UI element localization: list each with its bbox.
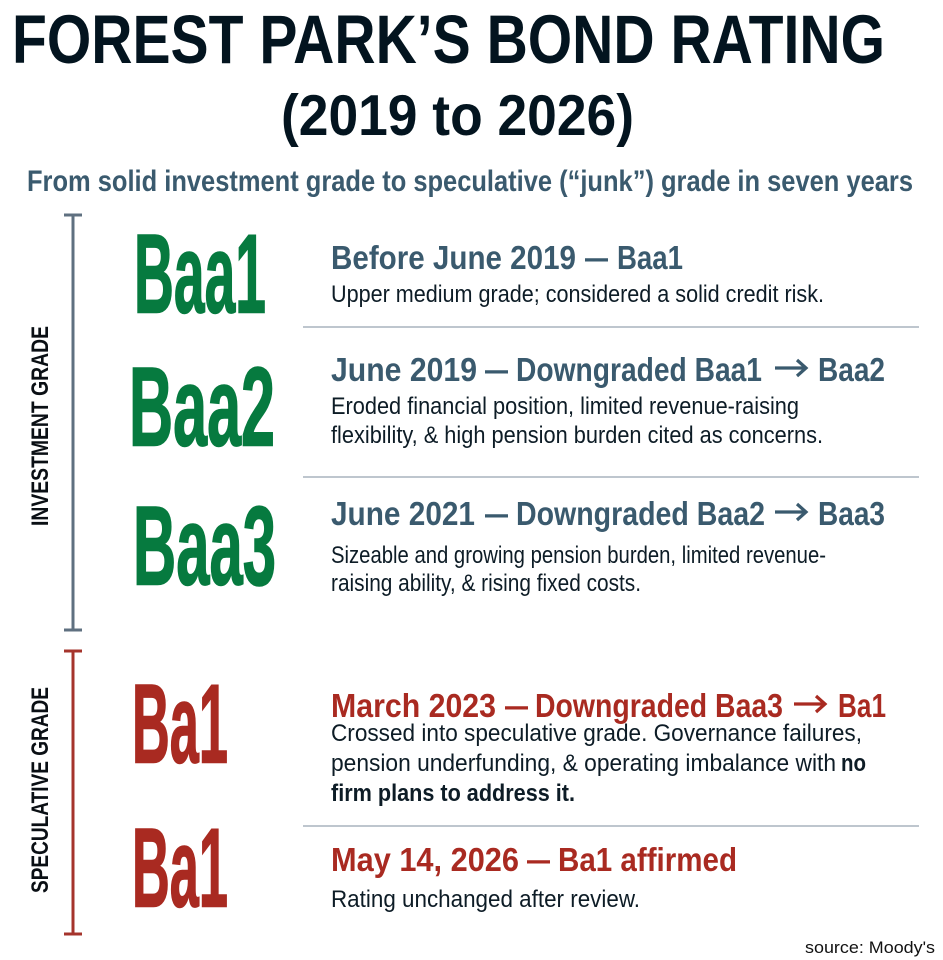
entry: before June 2019: Before June 2019: [331, 240, 576, 277]
entry: June 2019: June 2019: [331, 352, 477, 389]
rating: Baa3: Baa3: [133, 484, 276, 608]
title: (2019 to 2026): [281, 84, 634, 148]
bracket: investment grade: [27, 215, 82, 630]
entry: March 2023: no: [841, 750, 866, 777]
entry: March 2023: Crossed into speculative grade. Governance failures,: [331, 720, 862, 747]
text: Ba1: [132, 662, 228, 786]
entry: May 14, 2026: [331, 842, 737, 913]
rating: Baa2: Baa2: [129, 344, 275, 470]
entry: June 2019: Baa2: [818, 352, 885, 389]
entry: March 2023: Downgraded Baa3: [535, 688, 783, 725]
text: Baa1: [134, 212, 266, 336]
entry: June 2021: raising ability, & rising fixed costs.: [331, 570, 641, 597]
entry: before June 2019: Baa1: [617, 240, 683, 277]
entry: March 2023: March 2023: [331, 688, 496, 725]
entry: June 2021: Sizeable and growing pension burden, limited revenue-: [331, 542, 826, 569]
entry: March 2023: pension underfunding, & operating imbalance with: [331, 750, 836, 777]
text: Ba1: [132, 806, 228, 930]
bracket: investment grade: INVESTMENT GRADE: [27, 326, 54, 526]
entry: before June 2019: [331, 240, 824, 308]
entry: May 14, 2026: —: [527, 842, 550, 879]
title: [12, 1, 885, 148]
entry: before June 2019: —: [585, 240, 608, 277]
entry: June 2021: —: [485, 496, 508, 533]
bracket: speculative grade: SPECULATIVE GRADE: [27, 687, 54, 893]
entry: June 2021: June 2021: [331, 496, 475, 533]
entry: June 2019: Eroded financial position, limited revenue-raising: [331, 393, 799, 420]
entry: May 14, 2026: May 14, 2026: [331, 842, 519, 879]
entry: March 2023: [331, 688, 886, 807]
entry: June 2021: Baa3: [818, 496, 885, 533]
entry: March 2023: —: [505, 688, 528, 725]
source note: source: Moody's: [805, 938, 935, 957]
entry: June 2019: flexibility, & high pension burden cited as concerns.: [331, 422, 823, 449]
entry: March 2023: firm plans to address it.: [331, 780, 575, 807]
entry: June 2021: [331, 496, 885, 597]
entry: before June 2019: Upper medium grade; considered a solid credit risk.: [331, 281, 824, 308]
entry: May 14, 2026: Ba1 affirmed: [558, 842, 737, 879]
entry: June 2019: [331, 352, 885, 449]
entry: June 2021: Downgraded Baa2: [516, 496, 765, 533]
entry: June 2019: Downgraded Baa1: [516, 352, 762, 389]
entry: June 2019: —: [485, 352, 508, 389]
entry: March 2023: Ba1: [838, 688, 886, 725]
bracket: speculative grade: [27, 651, 82, 934]
entry: May 14, 2026: Rating unchanged after review.: [331, 886, 640, 913]
